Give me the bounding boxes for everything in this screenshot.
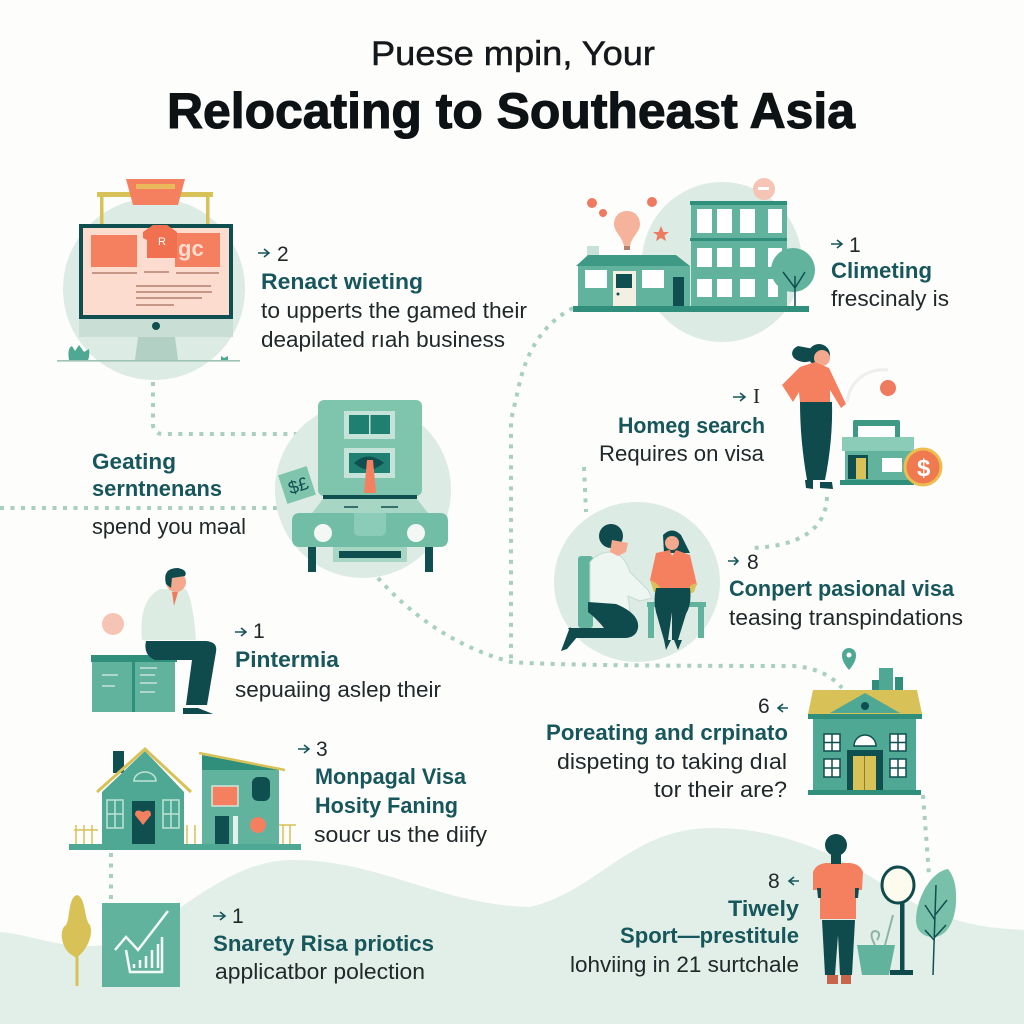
text block: Climeting: Climeting [831,258,932,283]
text block: step 2: to upperts the gamed their [261,298,527,323]
title: Puese mpin, Your [371,35,655,73]
panel: computer monitor illustration: R [158,236,166,248]
text block: Poreating: Poreating and crpinato [546,720,788,745]
text block: Poreating [546,695,788,802]
text block: Snarety: 1 [232,905,244,928]
panel: woman with shop illustration [782,344,941,489]
text block: Monpagal Visa: Hosity Faning [315,793,458,818]
text block: Homeg search: I [753,384,760,408]
text block: Poreating: tor their are? [654,777,787,802]
text block: Geating: spend you mǝal [92,514,246,539]
text block: Tiwely [570,870,800,977]
text block: step 2: 2 [277,243,289,266]
text block: Pintermia: sepuaiing aslep their [235,677,441,702]
text block: Pintermia: Pintermia [235,647,340,672]
text block: Tiwely: Sport—prestitule [620,923,799,948]
text block: step 2 [258,243,527,352]
panel: seated man illustration [91,568,216,714]
text block: Climeting [831,234,949,311]
dotted connector paths [0,308,929,902]
text block: Tiwely: 8 [768,870,780,893]
text block: Poreating: dispeting to taking dıal [557,749,787,774]
panel: couple illustration [554,502,720,662]
text block: Snarety: applicatbor polection [215,959,425,984]
text block: Conpert: 8 [747,551,759,574]
text block: Monpagal Visa: 3 [316,738,328,761]
text block: Snarety [213,905,434,984]
background hills [0,828,1024,1024]
panel: tree and growth chart icon [62,895,180,987]
panel: computer monitor illustration: gc [178,236,204,261]
panel: computer monitor illustration [57,179,245,380]
text block: Conpert: Conpert pasional visa [729,576,955,601]
text block: Homeg search: Requires on visa [599,441,765,466]
text block: Conpert: teasing transpindations [729,605,963,630]
panel: houses illustration [69,749,301,850]
panel: buildings illustration [573,178,815,342]
text block: Climeting: 1 [849,234,861,257]
title: Relocating to Southeast Asia [167,83,856,139]
text block: Monpagal Visa: soucr us the diify [314,822,487,847]
text block: Conpert [728,551,963,630]
text block: Geating [92,449,246,539]
text block: Climeting: frescinaly is [831,286,949,311]
text block: step 2: Renact wieting [261,269,423,294]
text block: Monpagal Visa: Monpagal Visa [315,764,467,789]
panel: central vehicle illustration [275,400,451,578]
text block: Poreating: 6 [758,695,770,718]
text block: Pintermia: 1 [253,620,265,643]
panel: central vehicle illustration: $£ [286,473,311,498]
text block: Homeg search [599,384,765,466]
panel: person with mirror and plant [813,834,956,984]
text block: Pintermia [235,620,441,702]
title [167,35,856,139]
text block: Snarety: Snarety Risa priotics [213,931,434,956]
panel: woman with shop illustration: $ [917,455,931,482]
text block: Tiwely: Tiwely [728,896,800,921]
text block: Tiwely: lohviing in 21 surtchale [570,952,799,977]
text block: Geating: serntnenans [92,476,222,501]
panel: school house illustration [808,648,922,795]
text block: step 2: deapilated rıah business [261,327,505,352]
text block: Geating: Geating [92,449,176,474]
text block: Homeg search: Homeg search [618,413,765,438]
text block: Monpagal Visa [298,738,487,847]
